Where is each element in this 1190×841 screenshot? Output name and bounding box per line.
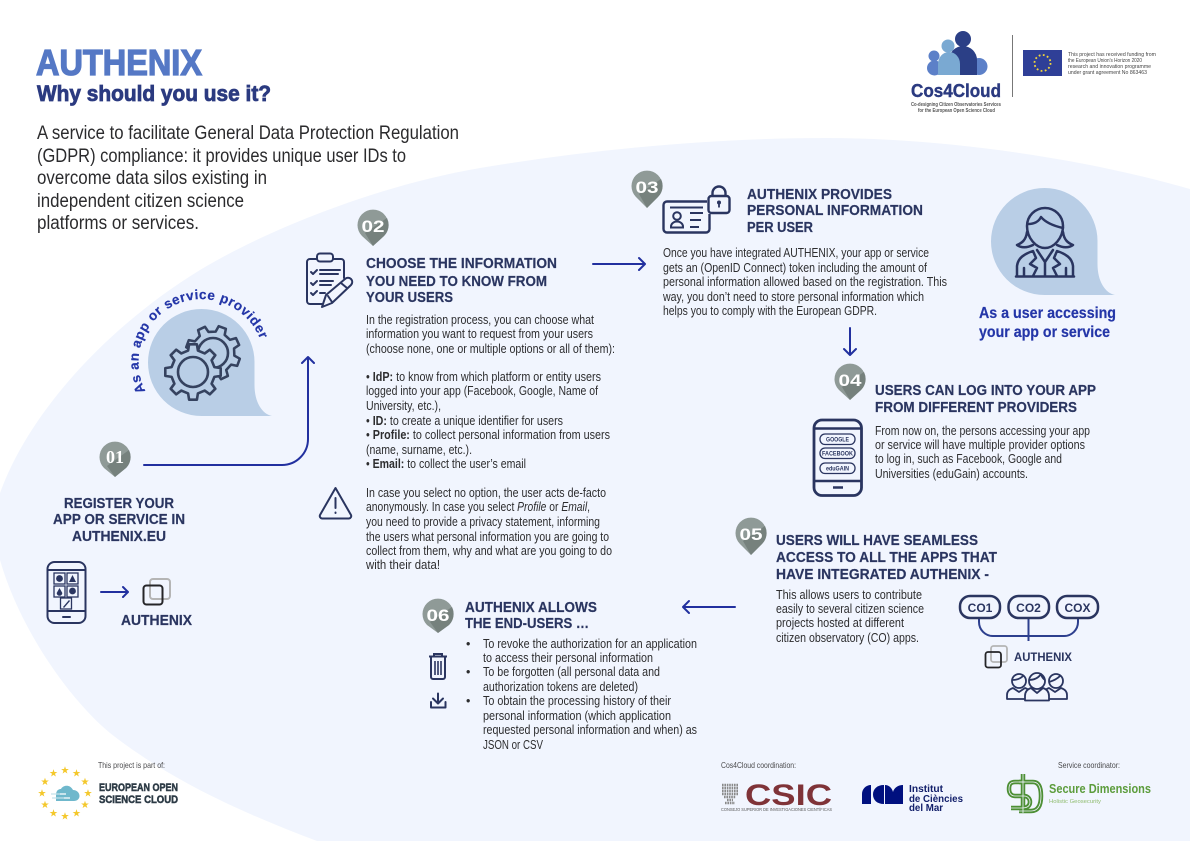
panel: step 05 (736, 518, 1098, 700)
footer: EOSC logo: ★ (41, 800, 50, 811)
body text: Universities (eduGain) accounts. (875, 467, 1028, 481)
footer: EOSC logo: ★ (61, 766, 70, 776)
body text: privacy note: with their data! (365, 558, 440, 572)
heading: PER USER (747, 220, 813, 236)
body text: easily to several citizen science (776, 602, 924, 616)
footer: CSIC logo: CSIC (745, 779, 832, 812)
bullet list: • (466, 637, 470, 651)
intro text: platforms or services. (37, 213, 199, 234)
footer: EOSC logo: ★ (81, 777, 90, 788)
body text: options: • Profile: to collect personal information from users (366, 428, 610, 442)
body text: privacy note: collect from them, why and what are you going to do (366, 544, 612, 558)
heading: YOUR USERS (366, 290, 453, 306)
heading (366, 256, 557, 306)
icon: user (1016, 208, 1074, 276)
icon: phone with apps (48, 562, 86, 623)
diagram: citizen observatories connected to Authenix (960, 596, 1098, 700)
footer: EOSC logo: SCIENCE CLOUD (99, 794, 178, 806)
footer: ICM logo: de Ciències (909, 794, 963, 805)
panel: step 01 (48, 442, 192, 629)
panel: step 06 (422, 599, 697, 752)
body text: privacy note: the users what personal information you are going to (366, 530, 609, 544)
intro text: (GDPR) compliance: it provides unique user IDs to (37, 146, 406, 167)
heading: PERSONAL INFORMATION (747, 203, 923, 219)
body text: options: University, etc.), (366, 399, 441, 413)
badge 02 (357, 210, 389, 246)
arrow: step 05 to 06 (683, 601, 735, 613)
panel: app or service provider bubble (131, 289, 272, 416)
subtitle: Why should you use it? (37, 81, 271, 106)
bullet list: to access their personal information (483, 651, 653, 665)
Authenix label: AUTHENIX (121, 613, 192, 629)
EU funding statement (1068, 52, 1157, 76)
footer: Secure Dimensions logo: Service coordinator: (1058, 760, 1120, 770)
diagram: citizen observatories connected to Authenix: AUTHENIX (1014, 652, 1072, 664)
icon: trash can (429, 654, 447, 679)
arrow: step 01 to 02 (144, 357, 314, 465)
bullet list (466, 637, 697, 752)
footer: EOSC logo (38, 760, 178, 822)
panel: step 03 (632, 171, 947, 318)
body text: personal information allowed based on the registration. This (663, 275, 947, 289)
EU funding statement: This project has received funding from (1068, 52, 1157, 58)
icon: ID card with lock (664, 186, 730, 232)
footer: EOSC logo: ★ (72, 808, 81, 820)
badge 01 (99, 442, 131, 477)
heading: YOU NEED TO KNOW FROM (366, 274, 547, 290)
footer: EOSC logo: ★ (49, 808, 58, 820)
diagram: citizen observatories connected to Authenix: CO2 (1016, 601, 1041, 615)
intro text: independent citizen science (37, 191, 244, 212)
heading: USERS WILL HAVE SEAMLESS (776, 533, 978, 549)
footer: ICM logo: del Mar (909, 803, 943, 814)
heading: HAVE INTEGRATED AUTHENIX - (776, 567, 989, 583)
body text: options: logged into your app (Facebook, Google, Name of (366, 384, 598, 398)
body text: gets an (OpenID Connect) token including the amount of (663, 261, 927, 275)
footer: EOSC logo: ★ (41, 777, 50, 788)
footer: ICM logo (862, 784, 963, 814)
footer: EOSC logo: ★ (49, 768, 58, 780)
body text: From now on, the persons accessing your app (875, 424, 1090, 438)
icon: download (431, 694, 446, 708)
body text: options: (choose none, one or multiple options or all of them): (366, 342, 615, 356)
heading: FROM DIFFERENT PROVIDERS (875, 400, 1077, 416)
heading: USERS CAN LOG INTO YOUR APP (875, 383, 1096, 399)
Cos4Cloud logo: Cos4Cloud (911, 81, 1001, 101)
heading: REGISTER YOUR (64, 496, 174, 512)
body text (875, 424, 1090, 481)
body text: options: • ID: to create a unique identifier for users (366, 414, 563, 428)
diagram: citizen observatories connected to Authenix: COX (1064, 601, 1091, 615)
EU funding statement: the European Union's Horizon 2020 (1068, 58, 1142, 64)
footer: CSIC logo (721, 760, 832, 812)
body text: options: • IdP: to know from which platform or entity users (366, 370, 601, 384)
bullet list: To revoke the authorization for an application (483, 637, 697, 651)
title: AUTHENIX (36, 42, 202, 83)
footer: ICM logo: Institut (909, 784, 944, 795)
body text: privacy note: you need to provide a privacy statement, informing (366, 515, 600, 529)
heading (465, 600, 597, 632)
footer: CSIC logo: CONSEJO SUPERIOR DE INVESTIGACIONES CIENTÍFICAS (721, 806, 832, 812)
bullet list: JSON or CSV (483, 738, 544, 752)
EU funding statement: under grant agreement No 863463 (1068, 70, 1147, 76)
Cos4Cloud logo (911, 31, 1001, 114)
bullet list: To be forgotten (all personal data and (483, 665, 660, 679)
intro text (37, 123, 459, 234)
footer: EOSC logo: This project is part of: (98, 760, 165, 770)
body text: options (366, 313, 615, 471)
curved label: As an app or service provider (131, 289, 267, 392)
footer: EOSC logo: ★ (38, 788, 47, 800)
badge 06: 06 (426, 606, 450, 625)
icon: gears (165, 318, 248, 400)
footer: EOSC logo: ★ (81, 800, 90, 811)
footer: Secure Dimensions logo: Holistic Geosecurity (1049, 799, 1101, 805)
bullet list: To obtain the processing history of their (483, 694, 671, 708)
heading: AUTHENIX ALLOWS (465, 600, 597, 616)
heading (747, 187, 923, 236)
footer: Secure Dimensions logo (1009, 760, 1151, 813)
icon: clipboard with pen (307, 254, 352, 307)
body text (662, 246, 947, 318)
arrow: step 03 to 04 (844, 328, 856, 355)
footer: Secure Dimensions logo: Secure Dimensions (1049, 782, 1151, 796)
body text: options: • Email: to collect the user’s email (366, 457, 526, 471)
diagram: citizen observatories connected to Authenix: CO1 (968, 601, 993, 615)
badge 06 (422, 599, 454, 633)
body text (776, 588, 924, 645)
intro text: overcome data silos existing in (37, 168, 267, 189)
badge 03: 03 (636, 178, 658, 197)
body text: privacy note (365, 486, 612, 572)
badge 01: 01 (106, 447, 124, 467)
bullet list: requested personal information and when) as (483, 723, 697, 737)
icon: phone with providers: FACEBOOK (822, 452, 854, 458)
label: your app or service (979, 324, 1110, 341)
heading (53, 496, 185, 545)
EU flag (1023, 50, 1062, 76)
arrow (101, 587, 128, 597)
icon: Authenix logo (144, 579, 170, 604)
footer: CSIC logo: Cos4Cloud coordination: (721, 760, 796, 770)
icon: phone with providers: eduGAIN (826, 466, 849, 472)
Cos4Cloud logo: Co-designing Citizen Observatories Services (911, 102, 1001, 108)
body text: to log in, such as Facebook, Google and (875, 452, 1062, 466)
badge 05 (736, 518, 767, 555)
body text: citizen observatory (CO) apps. (776, 631, 919, 645)
footer: EOSC logo: ★ (61, 812, 70, 822)
EU funding statement: research and innovation programme (1068, 64, 1151, 70)
Cos4Cloud logo: for the European Open Science Cloud (918, 108, 995, 114)
bullet list: personal information (which application (483, 709, 671, 723)
body text: options: (name, surname, etc.). (366, 443, 472, 457)
bullet list: authorization tokens are deleted) (483, 680, 638, 694)
body text: This allows users to contribute (776, 588, 922, 602)
body text: or service will have multiple provider options (875, 438, 1085, 452)
icon: group of users (1007, 673, 1067, 700)
heading: APP OR SERVICE IN (53, 512, 185, 528)
heading: CHOOSE THE INFORMATION (366, 256, 557, 272)
footer: EOSC logo: ★ (84, 788, 93, 800)
speech bubble (148, 309, 272, 416)
body text: helps you to comply with the European GDPR. (663, 304, 877, 318)
label: As a user accessing (979, 305, 1116, 322)
heading: ACCESS TO ALL THE APPS THAT (776, 550, 997, 566)
panel: user bubble (979, 188, 1116, 341)
speech bubble (991, 188, 1115, 295)
heading (776, 533, 997, 583)
bullet list: • (466, 665, 470, 679)
heading: THE END-USERS … (465, 616, 589, 632)
body text: privacy note: anonymously. In case you select Profile or Email, (366, 500, 590, 514)
arrow: step 02 to 03 (593, 258, 645, 270)
body text: options: information you want to request from your users (366, 327, 593, 341)
heading: AUTHENIX.EU (72, 529, 166, 545)
footer: EOSC logo: EUROPEAN OPEN (99, 782, 178, 794)
intro text: A service to facilitate General Data Protection Regulation (37, 123, 459, 144)
icon: phone with providers: GOOGLE (826, 438, 849, 444)
panel: step 04 (814, 364, 1096, 496)
icon: phone with providers (814, 420, 862, 496)
body text: way, you don’t need to store personal information which (662, 290, 924, 304)
body text: Once you have integrated AUTHENIX, your app or service (663, 246, 929, 260)
label (979, 305, 1116, 341)
heading (875, 383, 1096, 416)
body text: privacy note: In case you select no option, the user acts de-facto (366, 486, 606, 500)
badge 04: 04 (838, 371, 862, 390)
badge 04 (834, 364, 866, 400)
panel: step 02 (307, 210, 615, 572)
heading: AUTHENIX PROVIDES (747, 187, 892, 203)
footer: EOSC logo: ★ (72, 768, 81, 780)
body text: options: In the registration process, you can choose what (366, 313, 594, 327)
badge 03 (632, 171, 663, 208)
bullet list: • (466, 694, 470, 708)
icon: warning triangle (320, 488, 351, 518)
body text: projects hosted at different (776, 616, 904, 630)
badge 02: 02 (362, 217, 384, 236)
badge 05: 05 (740, 525, 762, 544)
